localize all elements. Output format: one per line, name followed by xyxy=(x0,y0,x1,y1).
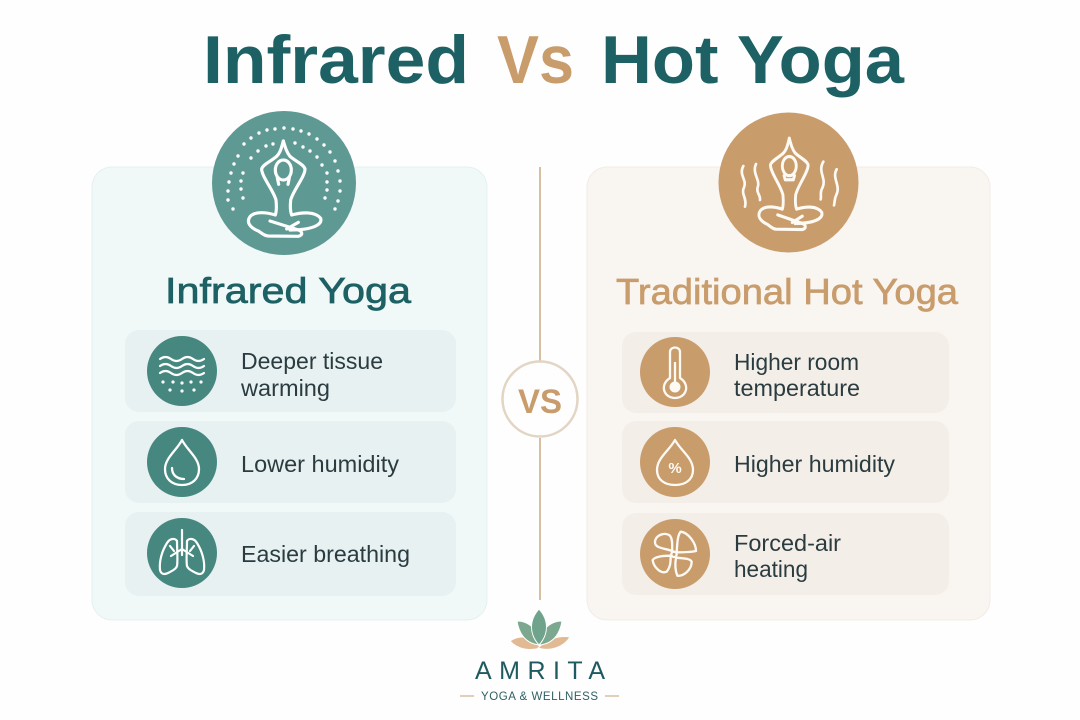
icon: water drop xyxy=(165,440,199,485)
icon: thermometer xyxy=(664,348,686,398)
text: forced-air heating: heating xyxy=(734,556,808,582)
icon: humidity drop with percent: % xyxy=(668,460,682,477)
icon: lungs xyxy=(160,530,204,574)
row: lower humidity xyxy=(125,421,456,503)
text: higher room temperature: Higher room xyxy=(734,349,859,375)
icon: hot yoga meditating figure xyxy=(718,112,858,252)
text: deeper tissue warming: warming xyxy=(240,375,330,401)
heading: infrared yoga: Infrared Yoga xyxy=(165,270,412,311)
wordmark: AMRITA xyxy=(475,657,605,685)
icon: fan xyxy=(653,532,696,576)
title: Vs xyxy=(497,22,574,98)
panel: traditional hot yoga xyxy=(587,112,990,620)
icon: humidity drop with percent xyxy=(657,440,693,485)
title: Hot Yoga xyxy=(601,22,905,98)
title: Infrared xyxy=(203,22,469,98)
row: easier breathing xyxy=(125,512,456,596)
panel: infrared yoga xyxy=(92,111,487,620)
tagline: YOGA & WELLNESS xyxy=(481,691,598,703)
text: easier breathing: Easier breathing xyxy=(241,541,410,567)
title xyxy=(203,22,905,98)
row: forced-air heating xyxy=(622,513,949,595)
text: lower humidity: Lower humidity xyxy=(241,451,400,477)
center divider with vs badge: VS xyxy=(518,383,562,421)
logo: amrita yoga and wellness xyxy=(460,609,619,703)
text: higher room temperature: temperature xyxy=(734,375,860,401)
icon: heat waves and dots xyxy=(160,357,204,393)
row: deeper tissue warming xyxy=(125,330,456,412)
text: forced-air heating: Forced-air xyxy=(734,530,841,556)
icon: lotus xyxy=(510,609,570,650)
center divider with vs badge xyxy=(502,167,578,600)
row: higher humidity xyxy=(622,421,949,503)
text: deeper tissue warming: Deeper tissue xyxy=(241,348,383,374)
row: higher room temperature xyxy=(622,332,949,413)
text: higher humidity: Higher humidity xyxy=(734,451,895,477)
icon: infrared meditating figure xyxy=(212,111,356,255)
heading: traditional hot yoga: Traditional Hot Yoga xyxy=(616,271,959,312)
